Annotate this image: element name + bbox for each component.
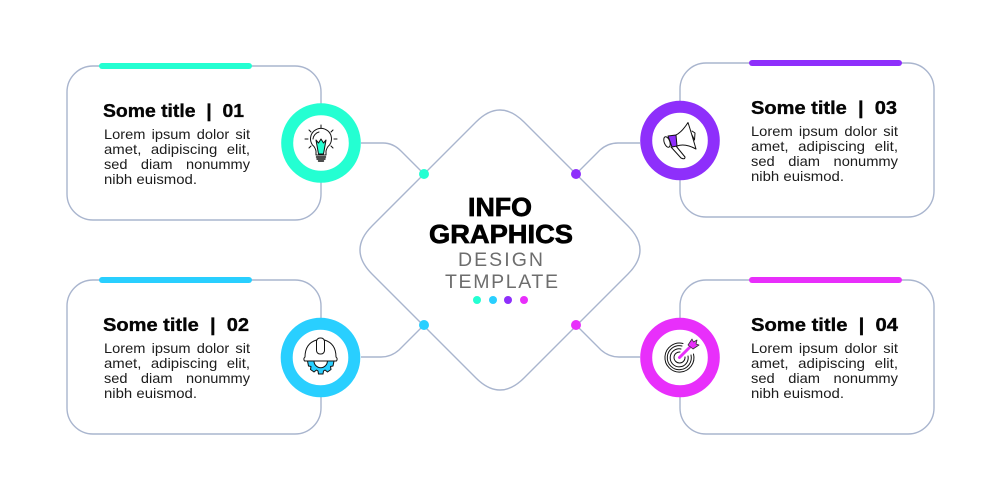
icon ring: megaphone	[646, 107, 714, 174]
connector: card 02 to diamond	[361, 325, 424, 357]
card 03 title: Some title | 03	[751, 97, 897, 118]
card 02 body text	[104, 340, 250, 401]
panel: card 01	[67, 63, 321, 220]
card 03 body text: sed diam nonummy	[751, 153, 898, 169]
central diamond panel	[360, 110, 640, 390]
icon: target with arrow	[665, 339, 699, 372]
card 03 body text: nibh euismod.	[751, 168, 844, 184]
card 03 body text: Lorem ipsum dolor sit	[751, 123, 898, 139]
connector dot 04	[571, 320, 581, 330]
panel: card 03	[680, 60, 934, 217]
card 04 body text: nibh euismod.	[751, 385, 844, 401]
card 02 body text: amet, adipiscing elit,	[104, 355, 250, 371]
card 01 body text	[104, 126, 250, 187]
card 02 body text: Lorem ipsum dolor sit	[104, 340, 250, 356]
card 04 body text	[751, 340, 898, 401]
panel: card 02	[67, 277, 321, 434]
colour dots row	[473, 296, 528, 304]
icon: hard hat and gear	[304, 338, 337, 374]
card 02 body text: nibh euismod.	[104, 385, 197, 401]
connector dot 01	[419, 169, 429, 179]
connector dot 03	[571, 169, 581, 179]
icon: megaphone	[662, 122, 696, 159]
central title: GRAPHICS	[429, 219, 573, 249]
card 03 body text: amet, adipiscing elit,	[751, 138, 898, 154]
icon: lightbulb	[305, 125, 337, 161]
panel: card 04	[680, 277, 934, 434]
card 04 body text: Lorem ipsum dolor sit	[751, 340, 898, 356]
card 01 body text: Lorem ipsum dolor sit	[104, 126, 250, 142]
card 02 body text: sed diam nonummy	[104, 370, 250, 386]
central title: TEMPLATE	[445, 271, 558, 293]
connector dot 02	[419, 320, 429, 330]
icon ring: target with arrow	[646, 324, 714, 391]
connector: card 04 to diamond	[576, 325, 640, 357]
card 04 body text: sed diam nonummy	[751, 370, 898, 386]
card 03 body text	[751, 123, 898, 184]
icon ring: hard hat and gear	[287, 324, 354, 391]
connector: card 01 to diamond	[361, 143, 424, 174]
connector: card 03 to diamond	[576, 143, 640, 174]
central title: DESIGN	[458, 249, 543, 271]
card 01 body text: nibh euismod.	[104, 171, 197, 187]
card 04 body text: amet, adipiscing elit,	[751, 355, 898, 371]
card 02 title: Some title | 02	[103, 314, 249, 335]
card 01 body text: sed diam nonummy	[104, 156, 250, 172]
icon ring: lightbulb	[287, 109, 355, 177]
card 01 body text: amet, adipiscing elit,	[104, 141, 250, 157]
central title	[429, 192, 573, 293]
card 04 title: Some title | 04	[751, 314, 899, 335]
central title: INFO	[468, 192, 532, 222]
card 01 title: Some title | 01	[103, 100, 244, 121]
